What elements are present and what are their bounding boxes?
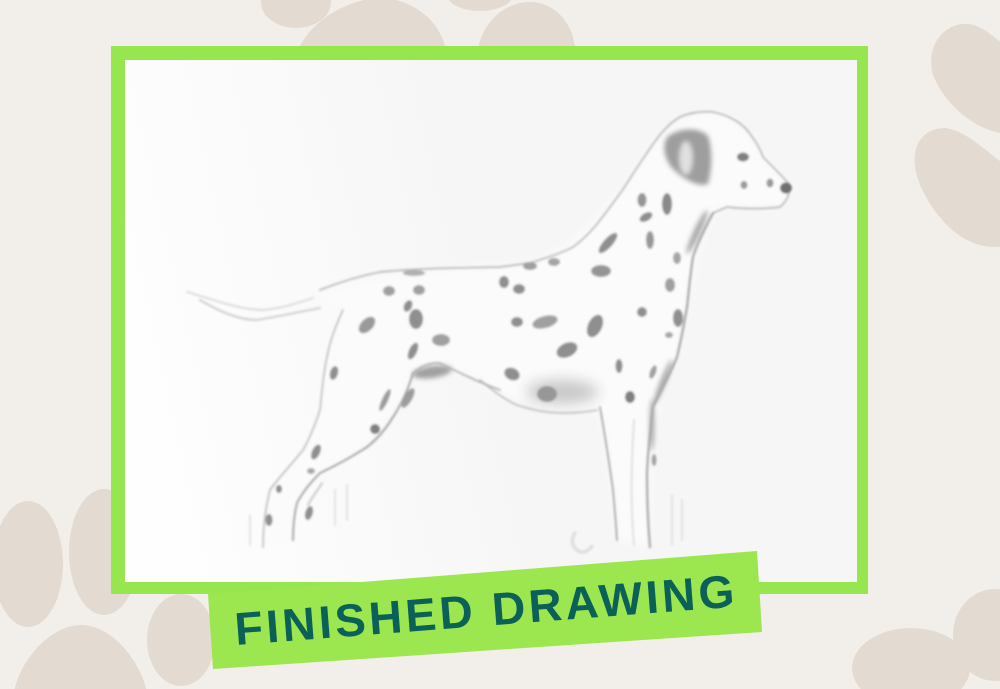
drawing frame xyxy=(111,46,868,594)
banner label: FINISHED DRAWING xyxy=(233,564,739,655)
dog shading xyxy=(526,380,598,404)
dog spots xyxy=(266,152,792,526)
banner: finished drawing xyxy=(208,551,762,669)
dog body highlight xyxy=(263,112,790,547)
dog ear xyxy=(664,129,711,185)
pencil drawing: dalmatian xyxy=(187,112,792,552)
dog outline xyxy=(187,112,790,552)
